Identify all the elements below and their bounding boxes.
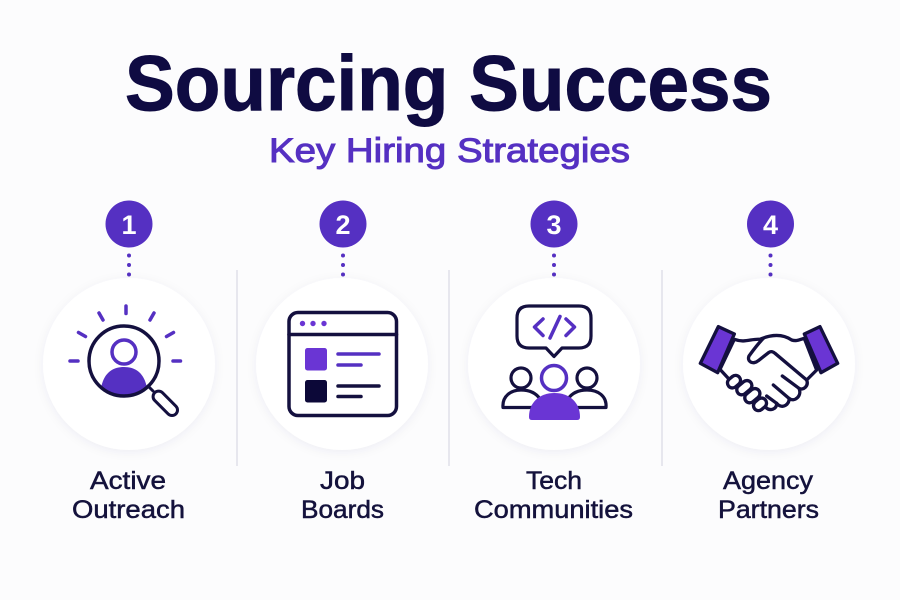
label: Active Outreach	[72, 467, 185, 524]
panel: job boards	[256, 200, 428, 524]
panel: active outreach	[66, 200, 192, 518]
label: Agency Partners: Partners	[718, 496, 819, 524]
step badge 1: 1	[121, 210, 137, 240]
connector dots 1	[127, 254, 131, 276]
title: Sourcing Success	[125, 39, 772, 127]
label: Agency Partners	[718, 467, 819, 524]
panel: tech communities	[468, 200, 640, 524]
connector dots 3	[552, 254, 556, 276]
label: Agency Partners: Agency	[723, 467, 814, 495]
step badge 4: 4	[763, 210, 778, 240]
label: Tech Communities: Communities	[474, 496, 633, 524]
label: Active Outreach: Outreach	[72, 496, 185, 524]
subtitle: Key Hiring Strategies	[269, 132, 630, 170]
icon: magnifier with person	[70, 306, 180, 418]
step badge 3	[530, 200, 578, 248]
step badge 3: 3	[546, 210, 562, 240]
step badge 2: 2	[335, 210, 351, 240]
label: Active Outreach: Active	[90, 467, 166, 495]
icon: community with code bubble	[503, 306, 606, 420]
icon: job board window	[289, 312, 396, 416]
label: Job Boards	[301, 467, 384, 524]
connector dots 2	[341, 254, 345, 276]
icon disc 3	[468, 278, 640, 450]
step badge 2	[320, 200, 366, 248]
label: Job Boards: Job	[320, 467, 365, 495]
label: Job Boards: Boards	[301, 496, 384, 524]
icon: handshake	[700, 327, 838, 413]
icon disc 4	[683, 278, 855, 450]
panel: agency partners	[683, 200, 855, 524]
icon disc 1	[43, 278, 215, 450]
step badge 1	[106, 200, 152, 248]
connector dots 4	[768, 254, 772, 276]
step badge 4	[747, 200, 794, 248]
label: Tech Communities: Tech	[526, 467, 582, 495]
label: Tech Communities	[474, 467, 633, 524]
icon disc 2	[256, 278, 428, 450]
